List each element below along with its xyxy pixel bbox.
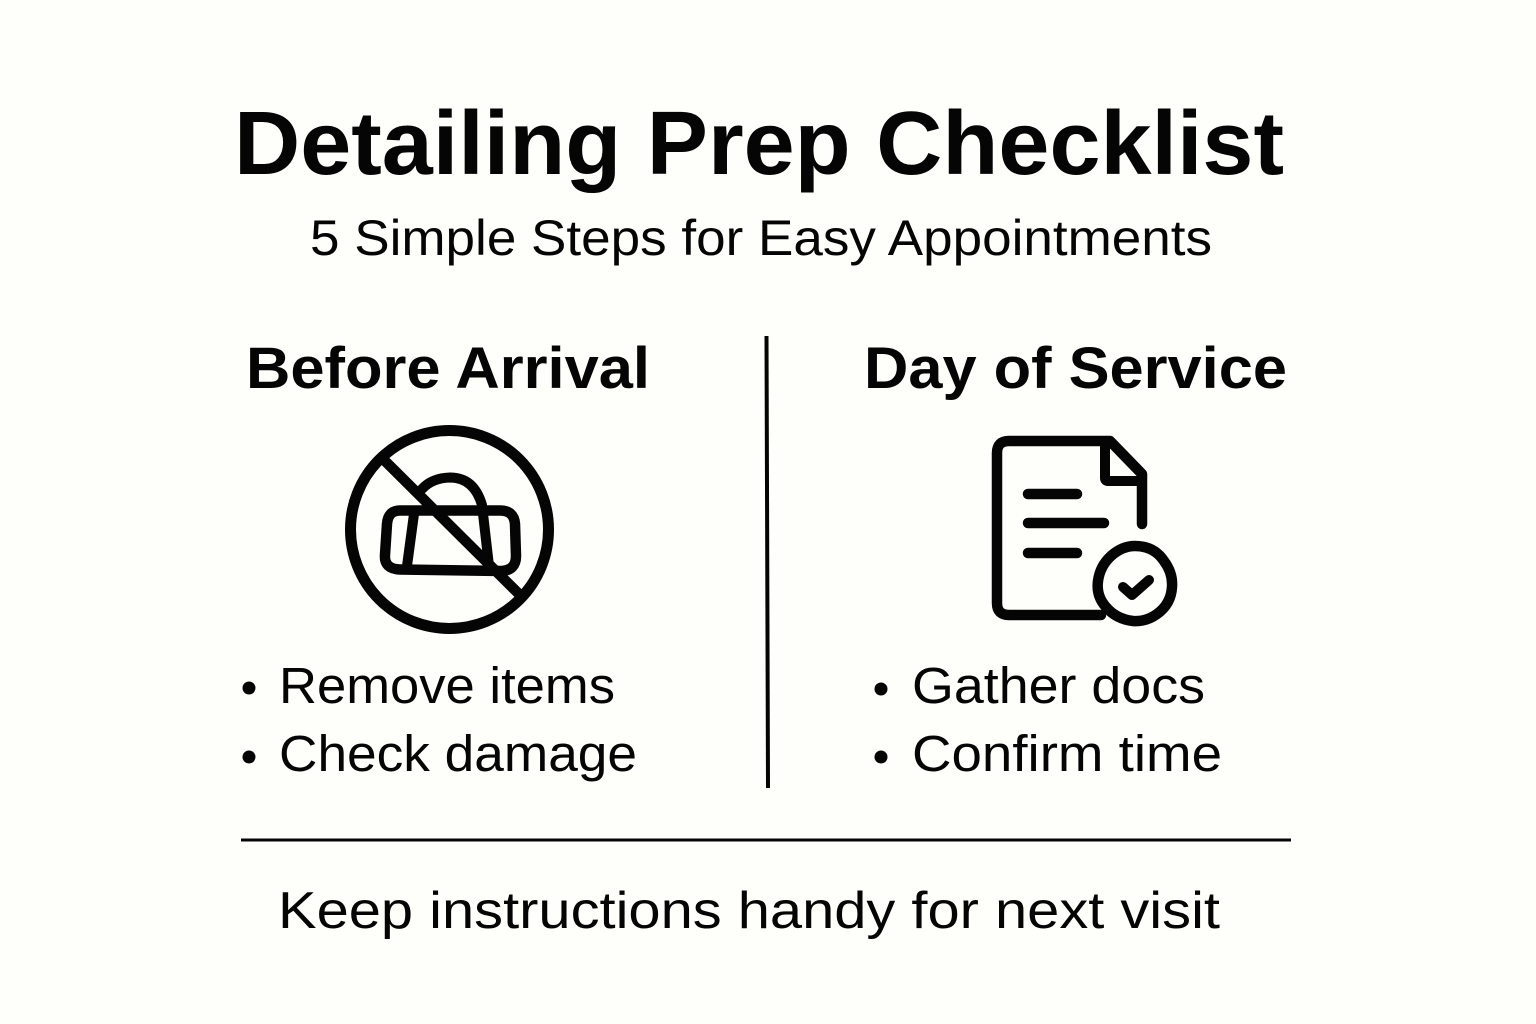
bullet list: day of service	[874, 657, 1222, 782]
bullet list: before arrival	[242, 657, 637, 782]
column divider	[766, 336, 768, 788]
panel: day of service	[864, 336, 1287, 782]
bullet list: day of service: Gather docs	[912, 657, 1205, 714]
bullet list: before arrival: Check damage	[279, 725, 637, 782]
footer note: Keep instructions handy for next visit	[278, 882, 1221, 940]
footer divider	[241, 838, 1291, 842]
icon: no bags	[350, 430, 548, 628]
panel: before arrival	[242, 336, 650, 782]
bullet list: before arrival: Remove items	[279, 657, 615, 714]
heading: day of service: Day of Service	[864, 336, 1287, 401]
bullet list: day of service: Confirm time	[912, 725, 1222, 782]
title: Detailing Prep Checklist	[234, 94, 1284, 194]
heading: before arrival: Before Arrival	[246, 336, 650, 401]
icon: document with check	[997, 441, 1172, 621]
subtitle: 5 Simple Steps for Easy Appointments	[310, 210, 1212, 266]
